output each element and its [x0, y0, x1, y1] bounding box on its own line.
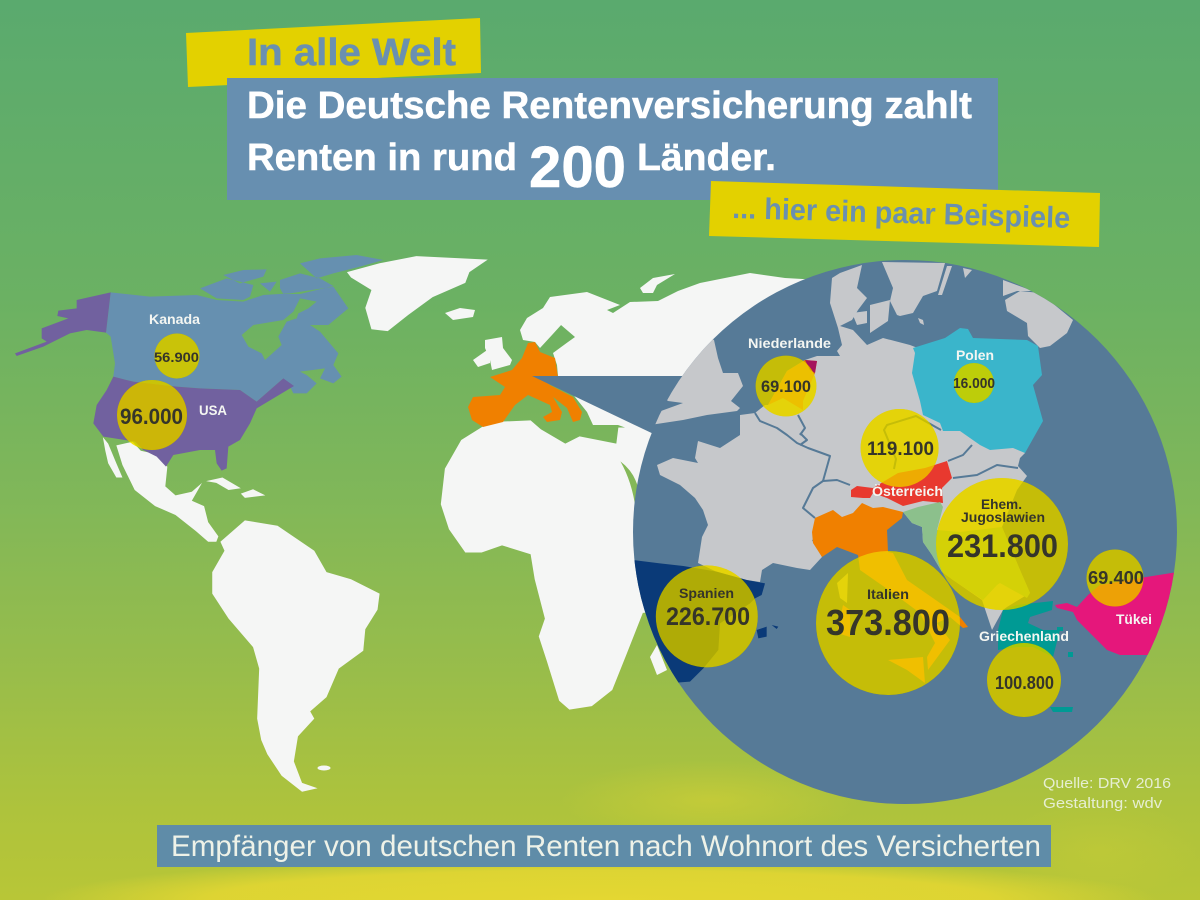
headline panel: Länder. [637, 137, 776, 179]
labels: north america [120, 311, 227, 429]
label: italien: Italien [867, 586, 909, 602]
landmass: arctic island [640, 274, 675, 293]
value: spain: 226.700 [666, 603, 750, 631]
landmass: greenland [347, 256, 488, 331]
region: europe highlighted [468, 342, 582, 427]
land: corsica [837, 573, 848, 603]
value: turkey: 69.400 [1088, 568, 1144, 588]
bubble: italy [816, 551, 960, 695]
value: italy: 373.800 [826, 602, 950, 643]
labels: europe [666, 335, 1152, 693]
label: usa: USA [199, 402, 227, 418]
label: jugoslawien: Jugoslawien [961, 509, 1045, 525]
red sea [620, 461, 639, 511]
value: netherlands: 69.100 [761, 377, 811, 396]
country: usa [93, 377, 294, 471]
value: yugoslavia: 231.800 [947, 528, 1058, 564]
headline panel: Die Deutsche Rentenversicherung zahlt [247, 85, 972, 127]
label: tuerkei: Tükei [1116, 611, 1152, 627]
landmass: south america [212, 520, 380, 792]
source credit: Quelle: DRV 2016 [1043, 775, 1171, 792]
borders [755, 413, 1018, 518]
country: austria [851, 461, 952, 506]
landmass: eurasia [520, 273, 820, 470]
landmass: madagascar [650, 645, 667, 675]
source credit: Gestaltung: wdv [1043, 795, 1163, 812]
land: scandinavia and baltics [852, 262, 1073, 348]
country: alaska [15, 292, 111, 356]
landmass: africa and arabia [441, 420, 694, 710]
label: griechenland: Griechenland [979, 628, 1069, 644]
value: germany: 119.100 [867, 439, 934, 460]
bubble: canada [154, 334, 200, 378]
bubbles [117, 334, 1144, 717]
bubble: spain [656, 565, 758, 667]
europe map [633, 262, 1190, 712]
landmass: mexico and central america [103, 437, 265, 542]
country: canada [106, 255, 383, 402]
falkland islands [318, 766, 330, 770]
landmass: iceland [445, 308, 475, 320]
landmass: british isles [473, 337, 512, 370]
zoom wedge [532, 376, 700, 437]
headline panel: Renten in rund [247, 137, 517, 179]
bubble: yugoslavia [936, 478, 1068, 610]
label: ehem: Ehem. [981, 496, 1022, 512]
bubble: turkey [1086, 550, 1144, 606]
label: polen: Polen [956, 347, 994, 363]
panel: europe magnifier [633, 260, 1190, 804]
world map [15, 255, 820, 792]
country: greece [998, 601, 1073, 712]
banner: examples: ... hier ein paar Beispiele [732, 192, 1071, 235]
source credit [1043, 775, 1171, 812]
label: oesterreich: Österreich [872, 483, 943, 499]
country: netherlands tip [805, 360, 817, 373]
country: netherlands [768, 360, 817, 410]
country: spain [633, 560, 778, 683]
bubble: poland [954, 363, 994, 403]
country: italy [812, 503, 968, 683]
label: niederlande: Niederlande [748, 335, 831, 351]
country: turkey [1055, 572, 1174, 655]
bubble: greece [987, 643, 1061, 717]
value: greece: 100.800 [995, 673, 1054, 693]
bubble: netherlands [756, 356, 816, 416]
headline panel: 200 [529, 135, 626, 200]
headline panel [227, 78, 998, 200]
value: canada: 56.900 [154, 349, 199, 365]
title banner: in alle welt [186, 18, 481, 87]
banner: examples [709, 181, 1100, 247]
country: former yugoslavia [903, 502, 1030, 600]
bubble: germany [861, 409, 939, 487]
land: continental europe [657, 265, 1030, 630]
label: kanada: Kanada [149, 311, 200, 327]
land: england [655, 340, 743, 424]
value: usa: 96.000 [120, 404, 183, 429]
bubble: usa [117, 380, 187, 450]
label: spanien: Spanien [679, 585, 734, 601]
caption bar: Empfänger von deutschen Renten nach Wohnort des Versicherten [171, 830, 1041, 863]
country: poland [912, 328, 1043, 453]
value: poland: 16.000 [953, 375, 995, 392]
title banner: in alle welt: In alle Welt [247, 32, 456, 74]
